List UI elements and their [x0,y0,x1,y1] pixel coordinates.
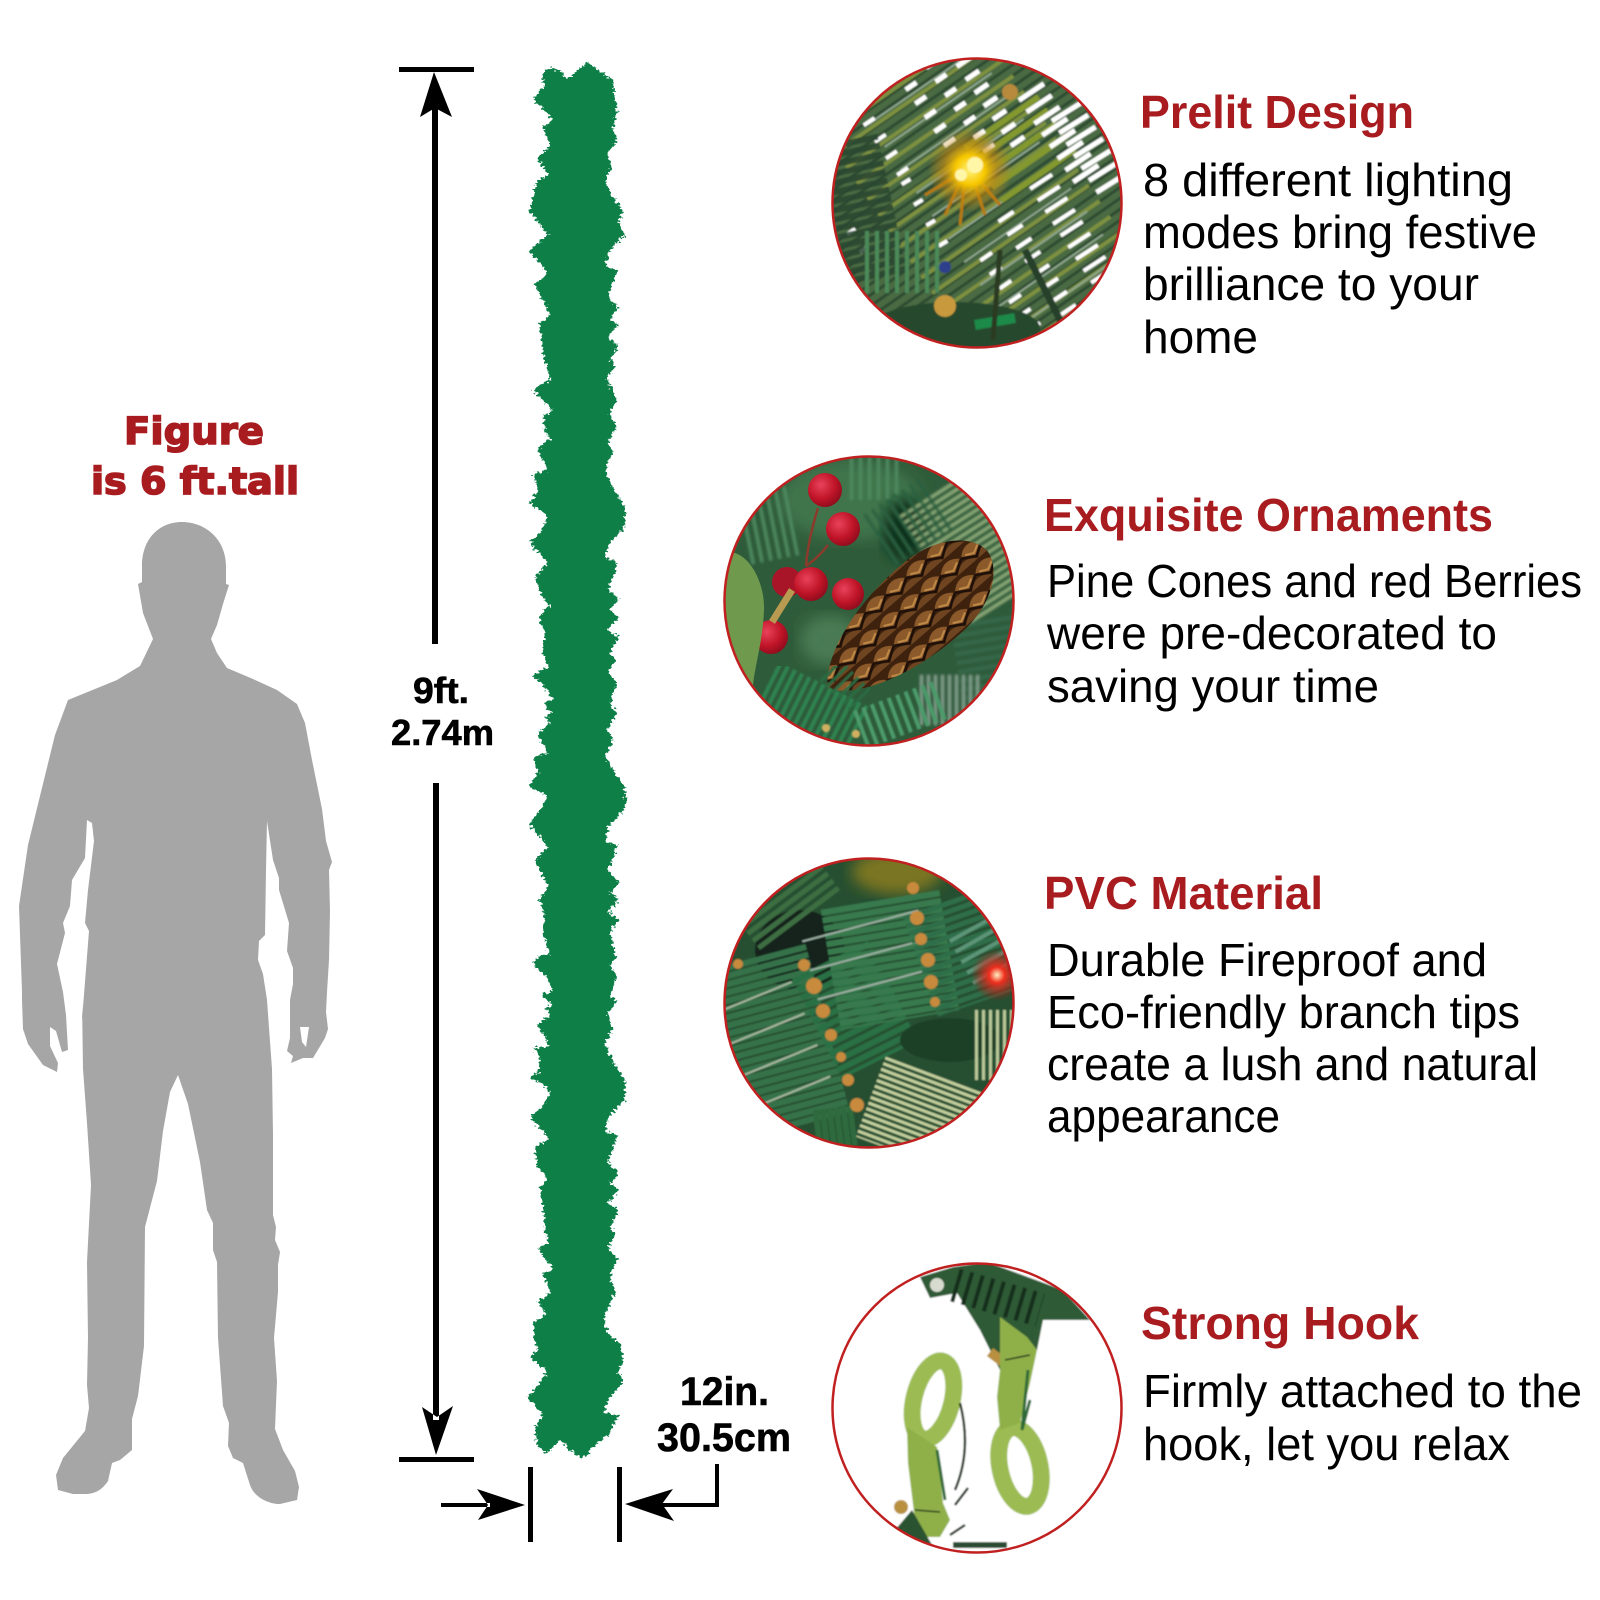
panel: pvc material [720,850,1538,1155]
body text: strong hook: hook, let you relax [1143,1418,1510,1470]
body text: pvc material: Durable Fireproof and [1047,934,1487,986]
body text: exquisite ornaments: Pine Cones and red Berries [1047,555,1582,607]
heading: exquisite ornaments: Exquisite Ornaments [1044,489,1493,541]
left inward arrow [441,1489,525,1520]
photo: pvc needle branch tips [720,850,1023,1155]
heading: strong hook: Strong Hook [1141,1297,1419,1349]
body text: strong hook: Firmly attached to the [1143,1365,1582,1417]
heading: prelit design: Prelit Design [1140,86,1414,138]
body text: exquisite ornaments: saving your time [1047,660,1379,712]
body text: exquisite ornaments: were pre-decorated to [1046,607,1497,659]
label: figure height: is 6 ft.tall [91,460,299,503]
label: 12in 30.5cm: 30.5cm [657,1416,791,1460]
body text: prelit design: home [1143,311,1258,363]
photo: pine cone and red berries [710,450,1020,750]
photo: green hook loops [830,1260,1124,1554]
heading: pvc material: PVC Material [1044,867,1323,919]
label: 9ft 2.74m [391,670,494,753]
label: 9ft 2.74m: 2.74m [391,712,494,753]
body text: prelit design: modes bring festive [1143,206,1537,258]
photo: lit pine branch [831,57,1123,349]
icon: man silhouette [19,522,332,1504]
label: figure height [91,410,299,503]
body text: prelit design [1143,154,1537,363]
label: figure height: Figure [124,410,264,453]
panel: exquisite ornaments [710,450,1582,750]
right inward arrow with elbow [625,1464,719,1521]
panel: strong hook [830,1260,1582,1554]
body text: pvc material: appearance [1047,1090,1280,1142]
label: 9ft 2.74m: 9ft. [413,670,469,711]
body text: pvc material: create a lush and natural [1047,1038,1538,1090]
body text: prelit design: 8 different lighting [1143,154,1513,206]
bottom limit bar and down arrow [399,783,474,1462]
width limit ticks [528,1467,622,1542]
garland silhouette [528,62,625,1459]
body text: exquisite ornaments [1046,555,1582,712]
width dimension 12in [441,1370,791,1542]
body text: prelit design: brilliance to your [1143,258,1479,310]
human figure height reference [19,410,332,1504]
label: 12in 30.5cm [657,1370,791,1460]
top limit bar and up arrow [399,67,474,644]
body text: strong hook [1143,1365,1582,1470]
body text: pvc material: Eco-friendly branch tips [1047,986,1520,1038]
body text: pvc material [1047,934,1538,1142]
label: 12in 30.5cm: 12in. [680,1370,769,1414]
panel: prelit design [830,39,1537,367]
height dimension 9ft [391,67,494,1462]
